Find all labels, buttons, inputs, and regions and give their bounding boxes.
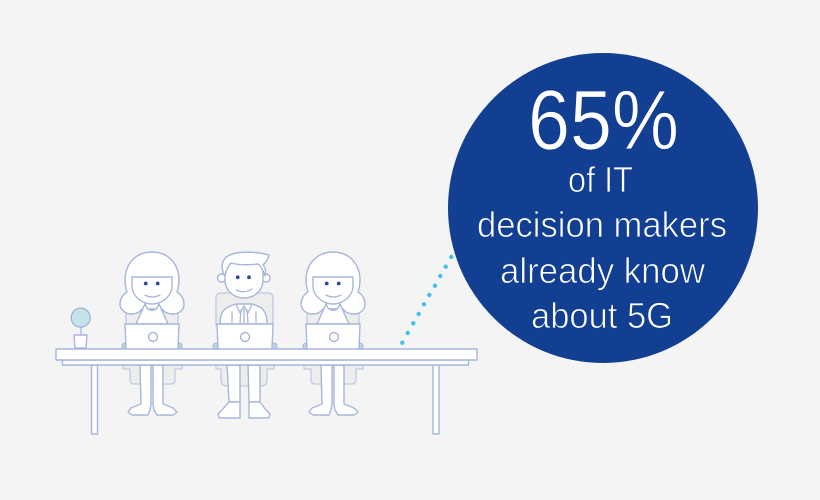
- chair and legs under table: [123, 365, 182, 415]
- dotted connector line: [400, 255, 453, 345]
- shirt and tie: [232, 304, 256, 323]
- eyes: [144, 282, 160, 285]
- description text: [477, 159, 727, 336]
- smile: [145, 295, 160, 297]
- description text: already know: [500, 250, 706, 291]
- hands: [303, 343, 363, 349]
- chair back: [126, 310, 178, 326]
- person: left woman: [120, 252, 184, 415]
- hair: [120, 252, 184, 314]
- person: man: [213, 252, 277, 418]
- ears: [218, 274, 270, 282]
- description text: about 5G: [531, 295, 673, 336]
- hair: [222, 252, 269, 276]
- chair back: [216, 293, 273, 326]
- hair: [301, 252, 365, 314]
- eyes: [236, 275, 251, 279]
- laptop: [217, 324, 273, 350]
- hands: [213, 343, 277, 349]
- suit: [220, 304, 267, 324]
- chair and legs under table: [216, 365, 274, 418]
- description text: of IT: [568, 159, 633, 200]
- smile: [236, 289, 252, 292]
- chair back: [307, 310, 359, 326]
- icon: potted plant: [71, 308, 90, 348]
- face: [132, 277, 172, 304]
- smile: [326, 295, 341, 297]
- torso: [136, 304, 168, 324]
- laptop: [125, 324, 179, 350]
- torso: [317, 304, 349, 324]
- eyes: [325, 282, 341, 285]
- hands: [122, 343, 182, 349]
- chair and legs under table: [304, 365, 363, 415]
- statistic: 65%: 65%: [528, 73, 679, 167]
- desk: [56, 349, 477, 434]
- face: [313, 277, 353, 304]
- callout circle: [448, 53, 758, 363]
- face: [225, 263, 263, 298]
- description text: decision makers: [477, 204, 727, 245]
- person: right woman: [301, 252, 365, 415]
- laptop: [306, 324, 360, 350]
